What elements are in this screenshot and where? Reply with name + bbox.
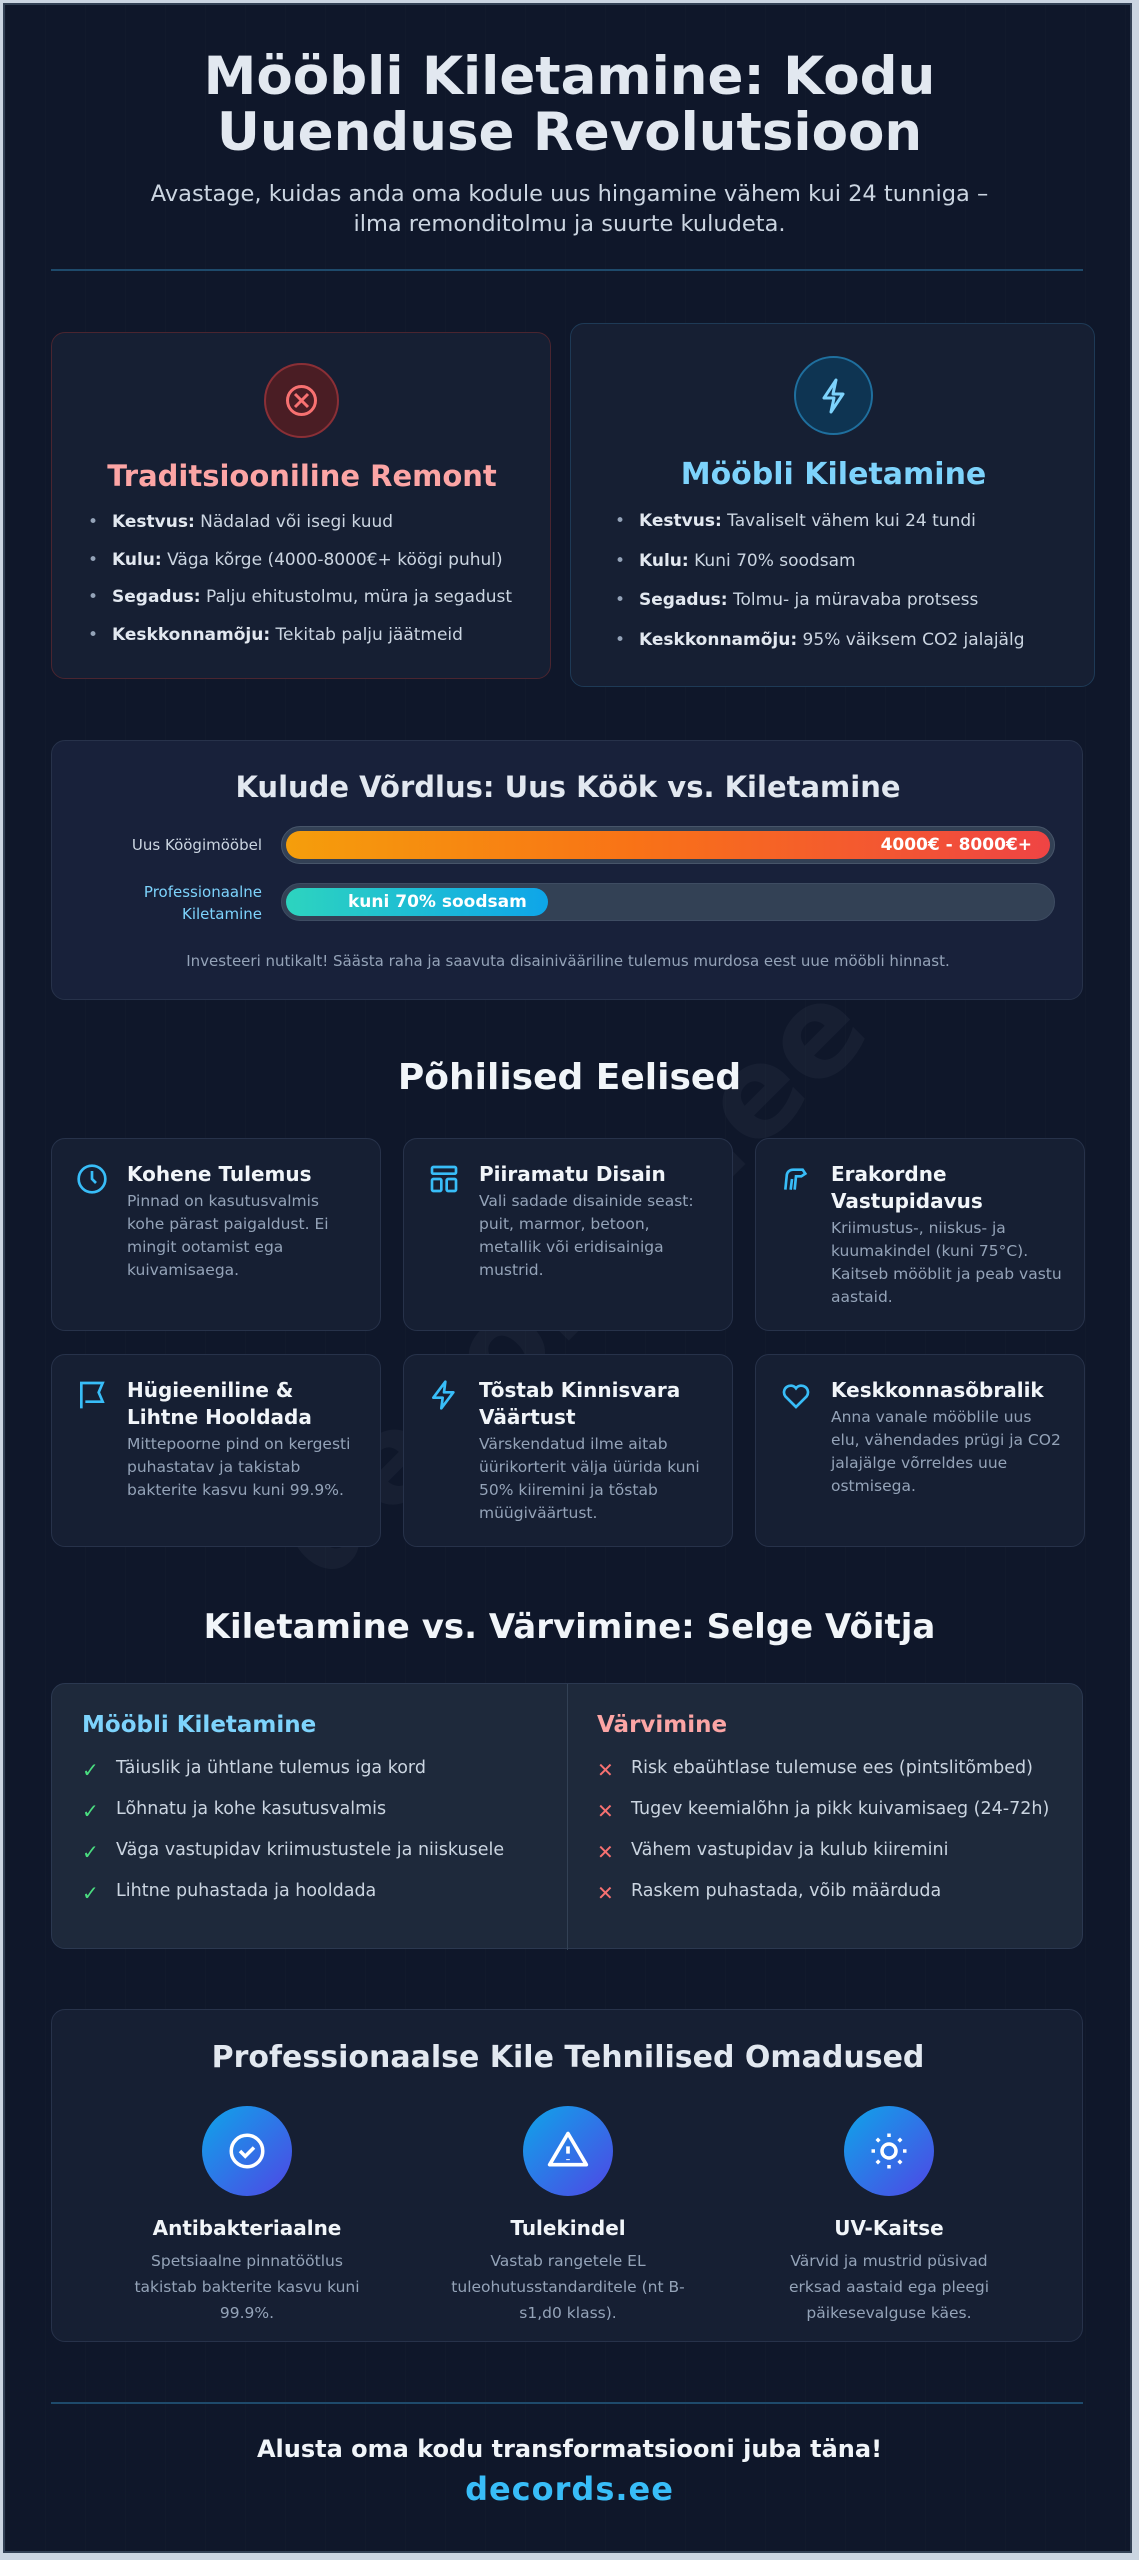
heading: Traditsiooniline Remont	[107, 459, 497, 493]
column: painting cons: Tugev keemialõhn ja pikk kuivamisaeg (24-72h)	[631, 1799, 1049, 1819]
feature: hygienic	[51, 1354, 381, 1547]
bar chart	[132, 826, 1055, 923]
title: Uuenduse Revolutsioon	[217, 102, 922, 163]
bar chart: Uus Köögimööbel	[132, 836, 262, 854]
column: wrapping pros: ✓	[82, 1881, 99, 1905]
feature: property value: Värskendatud ilme aitab üürikorterit välja üürida kuni 50% kiiremini ja tõstab müügiväärtust.	[479, 1435, 700, 1522]
property: UV protection: Värvid ja mustrid püsivad erksad aastaid ega pleegi päikesevalguse käes.	[789, 2252, 989, 2322]
column: wrapping pros: ✓	[82, 1799, 99, 1823]
bar chart: kuni 70% soodsam	[348, 892, 527, 912]
title: Mööbli Kiletamine: Kodu	[204, 46, 935, 107]
column: painting cons: ✕	[597, 1799, 614, 1823]
heading: Professionaalse Kile Tehnilised Omadused	[212, 2040, 924, 2075]
column: painting cons: ✕	[597, 1758, 614, 1782]
feature: instant result: Kohene Tulemus	[127, 1162, 312, 1186]
subtitle: Avastage, kuidas anda oma kodule uus hingamine vähem kui 24 tunniga –	[151, 181, 988, 207]
property: antibacterial	[134, 2106, 360, 2322]
feature: eco-friendly: Anna vanale mööblile uus elu, vähendades prügi ja CO2 jalajälge võrreldes uue ostmisega.	[831, 1408, 1061, 1495]
feature: hygienic: Mittepoorne pind on kergesti puhastatav ja takistab bakterite kasvu kuni 99.9%.	[127, 1435, 350, 1499]
column: painting cons: Vähem vastupidav ja kulub kiiremini	[631, 1840, 948, 1860]
note: Investeeri nutikalt! Säästa raha ja saavuta disainivääriline tulemus murdosa eest uue mööbli hinnast.	[186, 952, 950, 970]
column: wrapping pros	[82, 1712, 504, 1905]
panel: technical properties	[51, 2009, 1083, 2342]
list	[90, 512, 512, 644]
property: antibacterial: Spetsiaalne pinnatöötlus takistab bakterite kasvu kuni 99.9%.	[134, 2252, 360, 2322]
list: Kulu: Kuni 70% soodsam	[639, 550, 856, 570]
subtitle: ilma remonditolmu ja suurte kuludeta.	[353, 211, 786, 237]
column: wrapping pros: ✓	[82, 1840, 99, 1864]
title	[204, 46, 935, 163]
feature: instant result: Pinnad on kasutusvalmis kohe pärast paigaldust. Ei mingit ootamist ega kuivamisaega.	[127, 1192, 329, 1279]
column: wrapping pros: Lõhnatu ja kohe kasutusvalmis	[116, 1799, 386, 1819]
list: Keskkonnamõju: Tekitab palju jäätmeid	[112, 624, 463, 644]
list: Kulu: Väga kõrge (4000-8000€+ köögi puhul)	[112, 550, 503, 570]
bar chart: Professionaalne	[144, 883, 262, 901]
feature: unlimited design: Vali sadade disainide seast: puit, marmor, betoon, metallik või eridisainiga mustrid.	[479, 1192, 694, 1279]
property: antibacterial: Antibakteriaalne	[153, 2216, 341, 2240]
column: painting cons	[597, 1712, 1049, 1905]
column: wrapping pros: ✓	[82, 1758, 99, 1782]
column: painting cons: Risk ebaühtlase tulemuse ees (pintslitõmbed)	[631, 1758, 1033, 1778]
list: Segadus: Palju ehitustolmu, müra ja segadust	[112, 587, 512, 607]
feature: instant result	[51, 1138, 381, 1331]
column: wrapping pros: Mööbli Kiletamine	[82, 1712, 316, 1738]
property: fireproof: Tulekindel	[510, 2216, 626, 2240]
panel: cost comparison	[51, 740, 1083, 1000]
list: Segadus: Tolmu- ja müravaba protsess	[639, 590, 978, 610]
footer brand: decords.ee	[465, 2470, 674, 2508]
icon: bolt	[794, 356, 873, 435]
feature: durability: Erakordne Vastupidavus	[831, 1162, 983, 1213]
bar chart: 4000€ - 8000€+	[881, 835, 1032, 855]
column: wrapping pros: Lihtne puhastada ja hooldada	[116, 1881, 376, 1901]
bar chart: Kiletamine	[182, 905, 262, 923]
feature: durability	[755, 1138, 1085, 1331]
feature: property value	[403, 1354, 733, 1547]
feature: durability: Kriimustus-, niiskus- ja kuumakindel (kuni 75°C). Kaitseb mööblit ja peab vastu aastaid.	[831, 1219, 1062, 1306]
feature: eco-friendly: Keskkonnasõbralik	[831, 1378, 1044, 1402]
panel: comparison	[51, 1683, 1083, 1949]
feature: property value: Tõstab Kinnisvara Väärtust	[479, 1378, 680, 1429]
property: fireproof: Vastab rangetele EL tuleohutusstandarditele (nt B-s1,d0 klass).	[451, 2252, 685, 2322]
property: UV protection	[789, 2106, 989, 2322]
footer CTA: Alusta oma kodu transformatsiooni juba täna!	[257, 2435, 882, 2463]
heading: Kulude Võrdlus: Uus Köök vs. Kiletamine	[235, 770, 901, 804]
list	[618, 511, 1024, 650]
heading: key benefits: Põhilised Eelised	[398, 1057, 741, 1098]
list: Kestvus: Nädalad või isegi kuud	[112, 512, 393, 532]
column: wrapping pros: Väga vastupidav kriimustustele ja niiskusele	[116, 1840, 504, 1860]
feature: eco-friendly	[755, 1354, 1085, 1547]
list: Kestvus: Tavaliselt vähem kui 24 tundi	[639, 511, 976, 531]
icon: x circle	[264, 363, 339, 438]
feature: unlimited design	[403, 1138, 733, 1331]
subtitle	[151, 181, 988, 237]
column: painting cons: ✕	[597, 1840, 614, 1864]
column: painting cons: ✕	[597, 1881, 614, 1905]
property: UV protection: UV-Kaitse	[834, 2216, 944, 2240]
panel: traditional renovation	[51, 332, 551, 679]
column: painting cons: Raskem puhastada, võib määrduda	[631, 1881, 941, 1901]
column: wrapping pros: Täiuslik ja ühtlane tulemus iga kord	[116, 1758, 426, 1778]
feature: hygienic: Hügieeniline & Lihtne Hooldada	[127, 1378, 312, 1429]
panel: film wrapping	[570, 323, 1095, 687]
feature: unlimited design: Piiramatu Disain	[479, 1162, 666, 1186]
column: painting cons: Värvimine	[597, 1712, 727, 1738]
heading: wrapping vs painting: Kiletamine vs. Värvimine: Selge Võitja	[204, 1607, 935, 1647]
heading: Mööbli Kiletamine	[681, 457, 986, 492]
list: Keskkonnamõju: 95% väiksem CO2 jalajälg	[639, 630, 1024, 650]
watermark: decords.ee	[244, 954, 896, 1606]
property: fireproof	[451, 2106, 685, 2322]
